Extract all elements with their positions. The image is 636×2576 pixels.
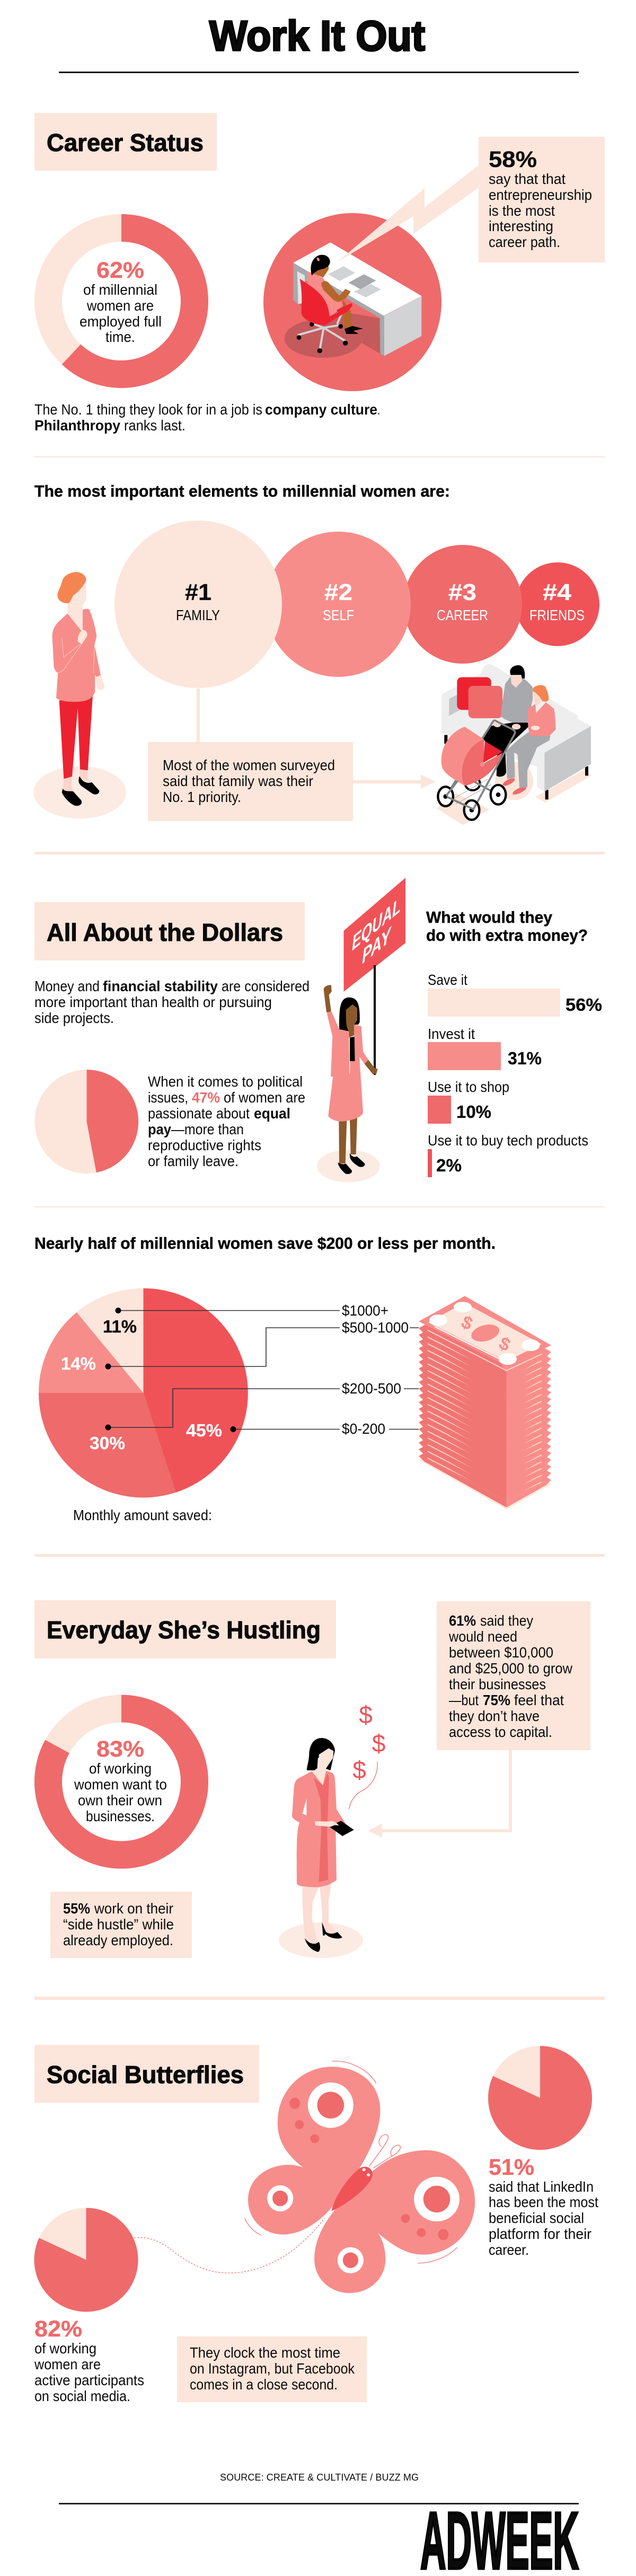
bubble: self: [266, 532, 411, 677]
text block: company culture: Philanthropy: [34, 417, 120, 434]
illustration: woman with phone and dollar signs: $: [359, 1701, 373, 1728]
leader lines and legend: $0-200: [342, 1421, 385, 1437]
text block: social media: of working: [34, 2340, 96, 2357]
callout: side hustle: work on their: [94, 1900, 173, 1917]
text block: company culture: [34, 401, 380, 434]
bubble labels: #3: [448, 579, 476, 605]
arrow to woman: [368, 1750, 512, 1838]
text block: company culture: company culture: [265, 401, 377, 418]
callout: 58 percent entrepreneurship: say that that: [489, 171, 566, 187]
illustration: stack of money: [419, 1296, 551, 1510]
heading: social butterflies: Social Butterflies: [47, 2061, 244, 2088]
bar chart: extra money: [428, 972, 602, 1177]
pie chart: 82 percent social media: [34, 2208, 138, 2312]
arrow to family illustration: [353, 774, 435, 789]
bubble labels: #2: [324, 579, 352, 605]
callout: 58 percent entrepreneurship: is the most: [489, 202, 555, 219]
panel: social butterflies: [34, 2045, 598, 2404]
pie chart: 47 percent equal pay: [35, 1070, 139, 1174]
panel: most important elements: [33, 482, 599, 825]
text block: equal pay: [148, 1073, 305, 1169]
panel: everyday she's hustling: [34, 1600, 590, 1958]
text block: social media: 82%: [34, 2316, 82, 2342]
donut chart: 83 percent own business: 83%: [96, 1736, 144, 1762]
text block: linkedin: platform for their: [489, 2226, 591, 2242]
callout: capital needs: feel that: [514, 1692, 564, 1708]
leader lines and legend: $500-1000: [342, 1319, 409, 1336]
heading: everyday she's hustling: Everyday She’s Hustling: [47, 1616, 321, 1644]
text block: financial stability: more important than health or pursuing: [34, 994, 272, 1010]
illustration: woman with equal pay sign: PAY: [362, 922, 392, 969]
callout: instagram: on Instagram, but Facebook: [190, 2360, 355, 2377]
donut chart: 83 percent own business: of working: [89, 1760, 152, 1777]
text block: company culture: .: [377, 401, 380, 418]
illustration: butterfly: [245, 2061, 475, 2293]
callout: capital needs: between $10,000: [449, 1644, 553, 1661]
pie chart: monthly amount saved: 11%: [103, 1317, 137, 1336]
heading: most important elements: The most important elements to millennial women are:: [34, 482, 450, 500]
callout: family priority: said that family was their: [163, 773, 313, 789]
leader lines and legend: $1000+: [342, 1302, 388, 1319]
bar: save it: 56%: [566, 995, 602, 1014]
bar: use it to shop: Use it to shop: [428, 1079, 509, 1095]
text block: social media: women are: [34, 2356, 101, 2372]
bubble labels: FRIENDS: [529, 607, 585, 623]
heading: social butterflies: [34, 2045, 259, 2103]
bubble: friends: [516, 562, 599, 646]
illustration: stack of money: $: [458, 1312, 476, 1334]
bar: use it to buy tech products: 2%: [436, 1155, 462, 1175]
text block: company culture: ranks last.: [124, 417, 186, 434]
panel: all about the dollars: [34, 878, 602, 1183]
text block: equal pay: of women are: [224, 1089, 305, 1106]
callout: family priority: [148, 742, 353, 821]
panel: career status: [34, 113, 605, 434]
callout: capital needs: 75%: [483, 1692, 510, 1708]
bar: use it to shop: [428, 1079, 509, 1124]
illustration: woman thinking: [33, 572, 126, 818]
bar: use it to buy tech products: [428, 1132, 588, 1177]
callout: family priority: No. 1 priority.: [163, 789, 241, 805]
callout: 58 percent entrepreneurship: career path.: [489, 234, 560, 250]
text block: social media: on social media.: [34, 2388, 130, 2404]
heading: everyday she's hustling: [34, 1600, 336, 1658]
caption: monthly amount saved: Monthly amount saved:: [73, 1507, 212, 1523]
donut chart: 83 percent own business: [48, 1709, 195, 1855]
pie chart: monthly amount saved: 30%: [90, 1433, 125, 1453]
heading: extra money question: [426, 908, 588, 945]
source line: SOURCE: CREATE & CULTIVATE / BUZZ MG: [220, 2472, 419, 2483]
heading: career status: Career Status: [47, 129, 204, 156]
text block: financial stability: Money and: [34, 978, 100, 994]
donut chart: 62 percent employed: 62%: [96, 258, 144, 283]
text block: linkedin: has been the most: [489, 2194, 598, 2210]
illustration: woman with phone and dollar signs: $: [352, 1756, 366, 1784]
callout: instagram: They clock the most time: [190, 2344, 340, 2361]
bubble labels: #1: [185, 579, 211, 605]
bubble labels: [176, 579, 585, 623]
heading: career status: [34, 113, 217, 171]
illustration: woman with phone and dollar signs: [279, 1701, 385, 1958]
text block: equal pay: equal: [254, 1105, 290, 1122]
text block: equal pay: passionate about: [148, 1105, 250, 1122]
donut chart: 83 percent own business: own their own: [78, 1792, 162, 1809]
pie chart: monthly amount saved: [39, 1288, 248, 1497]
callout: instagram: [177, 2336, 367, 2402]
bar: save it: Save it: [428, 972, 467, 988]
bubble labels: FAMILY: [176, 607, 220, 623]
donut chart: 83 percent own business: businesses.: [86, 1808, 155, 1824]
bubble: career: [403, 545, 522, 664]
heading: monthly savings: Nearly half of millennial women save $200 or less per month.: [34, 1234, 496, 1252]
text block: financial stability: side projects.: [34, 1010, 114, 1026]
callout: capital needs: [437, 1601, 590, 1750]
callout: side hustle: 55%: [63, 1900, 90, 1917]
donut chart: 62 percent employed: employed full: [80, 313, 162, 330]
pie chart: monthly amount saved: 45%: [186, 1421, 222, 1440]
bubble labels: CAREER: [437, 607, 488, 623]
leader lines and legend: $200-500: [342, 1380, 401, 1397]
callout: capital needs: would need: [448, 1628, 517, 1645]
callout: 58 percent entrepreneurship: 58%: [489, 147, 537, 172]
text block: equal pay: pay: [148, 1121, 171, 1137]
pie chart: monthly amount saved: 14%: [61, 1354, 96, 1373]
text block: financial stability: [34, 978, 310, 1026]
callout: capital needs: and $25,000 to grow: [449, 1660, 573, 1677]
text block: linkedin: career.: [489, 2242, 529, 2258]
illustration: family on sofa with stroller: [436, 664, 591, 825]
callout: capital needs: they don’t have: [449, 1708, 540, 1724]
dotted flight path: [134, 2218, 324, 2273]
bar: invest it: [428, 1026, 542, 1070]
illustration: woman with equal pay sign: [317, 878, 405, 1183]
donut chart: 62 percent employed: [48, 228, 195, 374]
text block: equal pay: —more than: [171, 1121, 244, 1137]
callout: side hustle: “side hustle” while: [63, 1916, 174, 1933]
callout: 58 percent entrepreneurship: interesting: [489, 218, 553, 234]
text block: linkedin: beneficial social: [489, 2210, 584, 2226]
bar: invest it: 31%: [508, 1048, 542, 1068]
text block: financial stability: are considered: [222, 978, 310, 994]
connector line from family bubble: [197, 689, 200, 742]
panel: monthly savings: [34, 1234, 551, 1523]
donut chart: 62 percent employed: of millennial: [83, 281, 157, 298]
illustration: woman with equal pay sign: EQUAL: [352, 893, 401, 956]
donut chart: 62 percent employed: time.: [105, 329, 135, 345]
callout: 58 percent entrepreneurship: [338, 137, 605, 262]
pie chart: 51 percent linkedin: [488, 2046, 592, 2150]
text block: equal pay: issues,: [148, 1089, 188, 1106]
bubble: family: [114, 521, 282, 688]
text block: equal pay: or family leave.: [148, 1153, 238, 1169]
callout: instagram: comes in a close second.: [190, 2376, 338, 2393]
callout: family priority: Most of the women surveyed: [163, 757, 335, 773]
bar: use it to shop: 10%: [456, 1102, 491, 1122]
illustration: woman with phone and dollar signs: $: [372, 1730, 385, 1757]
bubble labels: SELF: [323, 607, 354, 623]
title: Work It Out: [209, 12, 425, 59]
callout: capital needs: their businesses: [449, 1676, 546, 1692]
callout: side hustle: [50, 1892, 192, 1958]
callout: capital needs: said they: [480, 1612, 533, 1629]
text block: equal pay: reproductive rights: [148, 1137, 261, 1153]
bar: invest it: Invest it: [428, 1026, 475, 1042]
text block: company culture: The No. 1 thing they look for in a job is: [34, 401, 262, 418]
callout: 58 percent entrepreneurship: entrepreneurship: [489, 187, 592, 203]
illustration: woman at desk: [263, 213, 441, 391]
callout: capital needs: 61%: [449, 1612, 476, 1629]
callout: capital needs: access to capital.: [449, 1724, 552, 1740]
text block: equal pay: When it comes to political: [148, 1073, 303, 1090]
text block: linkedin: 51%: [489, 2155, 534, 2180]
illustration: stack of money: $: [496, 1333, 514, 1355]
bar: use it to buy tech products: Use it to buy tech products: [428, 1132, 588, 1149]
text block: linkedin: said that LinkedIn: [489, 2178, 594, 2195]
text block: equal pay: 47%: [192, 1089, 220, 1106]
heading: all about the dollars: All About the Dollars: [47, 919, 283, 946]
leader lines and legend: [105, 1302, 419, 1437]
donut chart: 83 percent own business: women want to: [74, 1776, 167, 1793]
text block: financial stability: financial stability: [103, 978, 218, 994]
bar: save it: [428, 972, 602, 1017]
heading: extra money question: do with extra money?: [426, 926, 588, 945]
text block: social media: active participants: [34, 2372, 144, 2388]
callout: side hustle: already employed.: [63, 1932, 173, 1948]
donut chart: 62 percent employed: women are: [86, 297, 154, 314]
callout: capital needs: —but: [449, 1692, 479, 1708]
heading: extra money question: What would they: [426, 908, 553, 927]
text block: social media: [34, 2316, 144, 2404]
heading: all about the dollars: [34, 902, 305, 960]
bubble labels: #4: [543, 579, 572, 605]
text block: linkedin: [489, 2155, 598, 2258]
